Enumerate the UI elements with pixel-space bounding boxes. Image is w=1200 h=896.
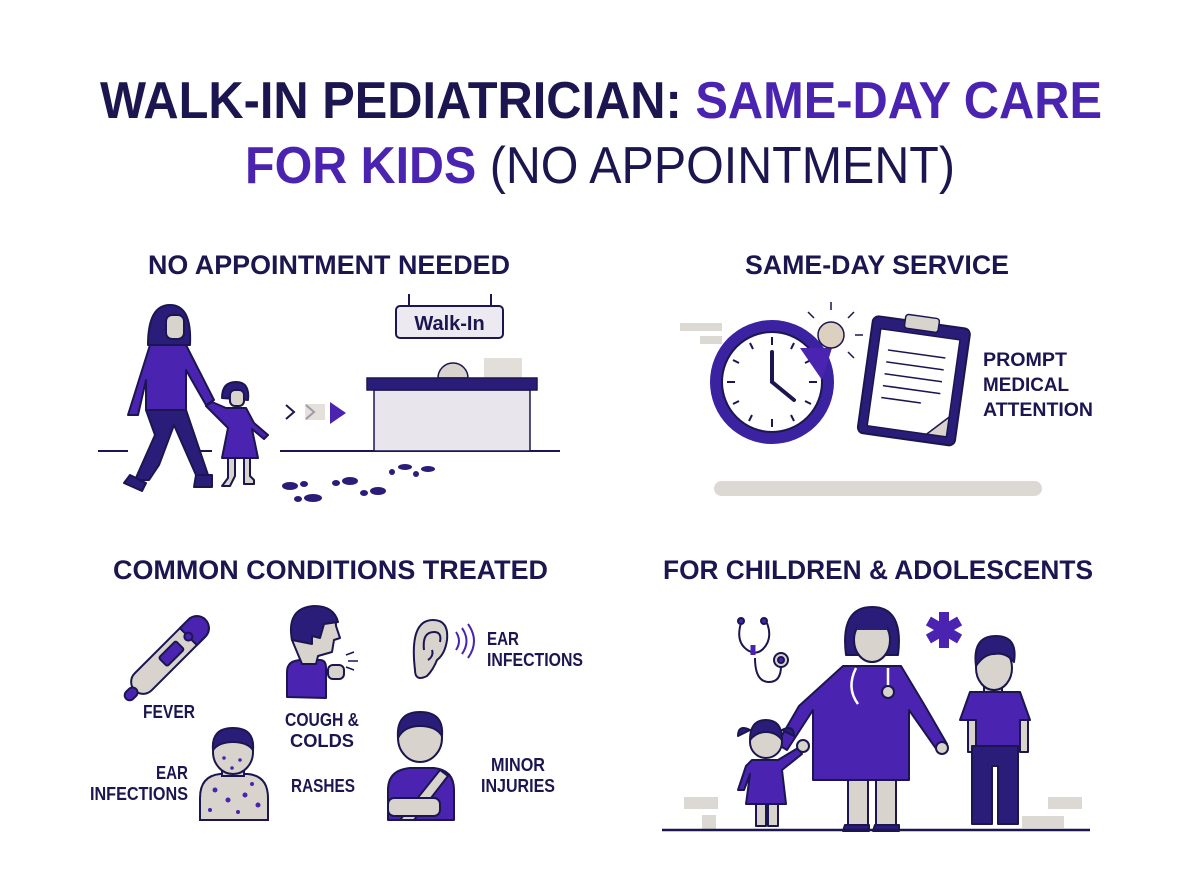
girl <box>738 720 809 826</box>
icon: clipboard <box>857 310 971 446</box>
text: prompt medical attention: MEDICAL <box>983 375 1069 396</box>
decorative bricks <box>684 797 1082 829</box>
label: ear infections (rash): EAR <box>156 763 188 783</box>
label: cough & colds: COUGH & <box>285 710 359 730</box>
icon: stethoscope <box>738 618 788 682</box>
doctor <box>777 607 948 831</box>
icon: boy with sling <box>388 712 454 820</box>
progress bar <box>714 481 1042 496</box>
footprints <box>282 464 435 502</box>
sign: walk-in <box>396 294 503 338</box>
decorative gray blocks <box>680 323 722 344</box>
boy <box>960 636 1030 824</box>
label: cough & colds <box>285 710 359 751</box>
label: ear infections (rash): INFECTIONS <box>90 784 188 804</box>
heading: for children & adolescents: FOR CHILDREN & ADOLESCENTS <box>663 555 1093 585</box>
icon: boy with rash <box>200 728 268 820</box>
heading: no appointment needed: NO APPOINTMENT NEEDED <box>148 250 510 280</box>
icon: sun <box>808 302 863 358</box>
icon: coughing boy <box>287 606 358 698</box>
label: cough & colds: COLDS <box>290 731 354 751</box>
reception desk <box>367 358 537 451</box>
label: fever: FEVER <box>143 702 195 722</box>
label: minor injuries: MINOR <box>491 755 545 775</box>
icon: clock <box>710 320 834 444</box>
text: prompt medical attention: PROMPT <box>983 350 1067 371</box>
panel: walk-in illustration <box>98 305 560 491</box>
label: ear infections: INFECTIONS <box>487 650 583 670</box>
label: ear infections <box>487 629 583 670</box>
mother <box>124 305 214 491</box>
title: FOR KIDS (NO APPOINTMENT) <box>245 137 955 195</box>
floor line <box>662 829 1090 831</box>
title <box>100 72 1102 195</box>
sign: walk-in: Walk-In <box>414 313 485 335</box>
icon: thermometer <box>118 611 214 707</box>
icon: ear <box>414 620 474 678</box>
child <box>206 382 268 486</box>
heading: same-day service: SAME-DAY SERVICE <box>745 250 1009 280</box>
title: WALK-IN PEDIATRICIAN: SAME-DAY CARE <box>100 72 1102 130</box>
label: ear infections (rash) <box>90 763 188 804</box>
label: minor injuries <box>481 755 555 796</box>
icon: star of life <box>926 612 962 648</box>
label: minor injuries: INJURIES <box>481 776 555 796</box>
label: ear infections: EAR <box>487 629 519 649</box>
text: prompt medical attention: ATTENTION <box>983 400 1093 421</box>
floor line <box>98 450 560 452</box>
heading: common conditions treated: COMMON CONDITIONS TREATED <box>113 555 548 585</box>
text: prompt medical attention <box>983 350 1093 421</box>
label: rashes: RASHES <box>291 776 355 796</box>
arrows <box>286 402 346 424</box>
